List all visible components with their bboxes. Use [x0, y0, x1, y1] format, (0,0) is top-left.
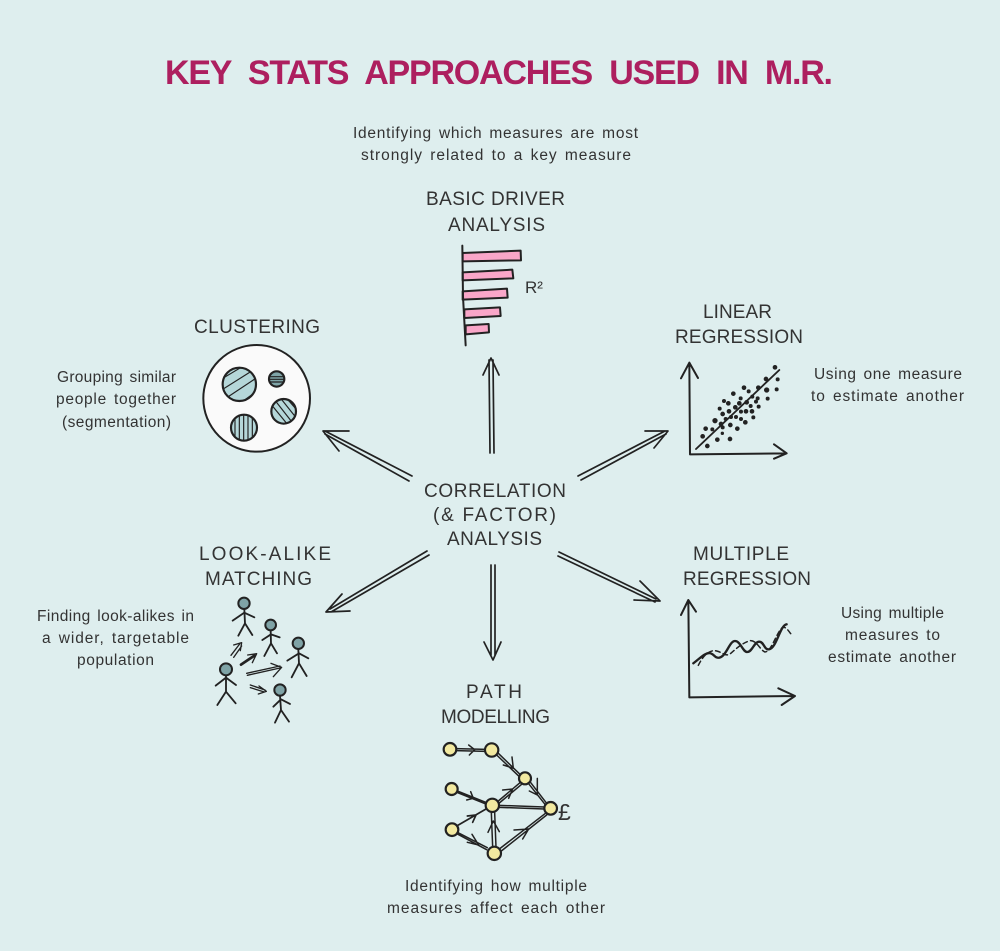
description: clustering: (segmentation) — [62, 414, 171, 431]
panel: correlation and factor analysis: CORRELATION — [424, 481, 566, 502]
heading: path modelling: PATH — [466, 682, 522, 703]
heading: linear regression: REGRESSION — [675, 327, 803, 348]
label: R squared: R² — [525, 278, 543, 297]
path diagram — [444, 743, 557, 860]
description: look-alike matching — [37, 608, 194, 669]
heading: multiple regression: MULTIPLE — [693, 544, 789, 565]
panel: clustering — [56, 317, 320, 452]
panel: correlation and factor analysis: ANALYSIS — [447, 529, 542, 550]
description: multiple regression — [828, 605, 956, 666]
arrow: to multiple regression — [558, 552, 660, 602]
description: basic driver analysis: Identifying which measures are most — [353, 125, 639, 142]
panel: look-alike matching — [37, 544, 331, 723]
heading: look-alike matching: MATCHING — [205, 569, 312, 590]
description: look-alike matching: population — [77, 652, 154, 669]
scatter chart with trend line — [681, 363, 787, 459]
description: path modelling: Identifying how multiple — [405, 878, 587, 895]
icon: clusters in a circle — [203, 345, 310, 452]
arrow: to path modelling — [484, 565, 501, 660]
description: linear regression: Using one measure — [814, 366, 962, 383]
description: look-alike matching: Finding look-alikes in — [37, 608, 194, 625]
description: clustering — [56, 369, 176, 431]
description: look-alike matching: a wider, targetable — [42, 630, 189, 647]
description: basic driver analysis — [353, 125, 639, 164]
description: clustering: people together — [56, 391, 176, 408]
arrow: to clustering — [323, 431, 412, 481]
heading: basic driver analysis: ANALYSIS — [448, 215, 545, 236]
panel: basic driver analysis — [353, 125, 639, 345]
label: pound sign: £ — [558, 799, 571, 825]
panel: linear regression — [675, 302, 964, 459]
heading: basic driver analysis: BASIC DRIVER — [426, 189, 565, 210]
panel: multiple regression — [681, 544, 956, 705]
heading: path modelling: MODELLING — [441, 707, 550, 728]
heading: look-alike matching: LOOK-ALIKE — [199, 544, 331, 565]
description: multiple regression: measures to — [845, 627, 940, 644]
icon: stick figures with arrows — [216, 598, 308, 723]
heading: clustering: CLUSTERING — [194, 317, 320, 338]
heading: linear regression — [675, 302, 803, 348]
heading: linear regression: LINEAR — [703, 302, 772, 323]
bar chart: R squared — [462, 246, 521, 345]
description: linear regression: to estimate another — [811, 388, 964, 405]
heading: path modelling — [441, 682, 550, 728]
arrow: to look-alike matching — [326, 551, 429, 612]
heading: look-alike matching — [199, 544, 331, 590]
line chart with fitted curve — [681, 600, 795, 705]
panel: correlation and factor analysis: (& FACTOR) — [433, 505, 556, 526]
arrow: up to basic driver analysis — [483, 358, 499, 453]
description: linear regression — [811, 366, 964, 405]
panel: path modelling — [387, 682, 605, 917]
arrow: to linear regression — [578, 431, 668, 480]
description: path modelling: measures affect each other — [387, 900, 605, 917]
heading: multiple regression: REGRESSION — [683, 569, 811, 590]
description: clustering: Grouping similar — [57, 369, 176, 386]
heading: basic driver analysis — [426, 189, 565, 236]
panel: correlation and factor analysis — [424, 481, 566, 550]
description: multiple regression: estimate another — [828, 649, 956, 666]
title: KEY STATS APPROACHES USED IN M.R. — [165, 54, 833, 92]
description: multiple regression: Using multiple — [841, 605, 944, 622]
heading: multiple regression — [683, 544, 811, 590]
description: path modelling — [387, 878, 605, 917]
description: basic driver analysis: strongly related to a key measure — [361, 147, 631, 164]
